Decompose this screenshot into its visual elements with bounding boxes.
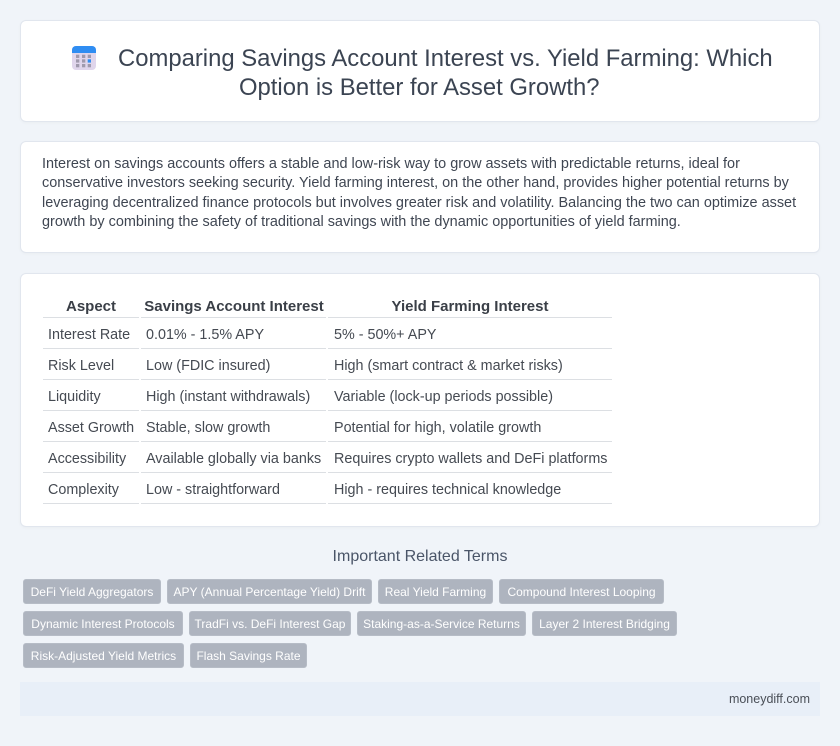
intro text: conservative investors seeking security. Yield farming interest, on the other hand, provides higher potential returns by bbox=[42, 175, 789, 191]
tag group: related terms: Real Yield Farming bbox=[385, 585, 486, 599]
comparison table: Available globally via banks bbox=[146, 451, 321, 467]
tag group: related terms: Compound Interest Looping bbox=[507, 585, 656, 599]
intro text: Interest on savings accounts offers a stable and low-risk way to grow assets with predictable returns, ideal for bbox=[42, 156, 740, 172]
comparison table: Complexity bbox=[48, 482, 119, 498]
comparison table: Interest Rate bbox=[48, 327, 130, 343]
panel: intro card bbox=[20, 141, 820, 253]
comparison table: Aspect bbox=[66, 298, 116, 315]
tag group: related terms: APY (Annual Percentage Yield) Drift bbox=[174, 585, 365, 599]
heading: related terms: Important Related Terms bbox=[333, 548, 507, 565]
comparison table: Risk Level bbox=[48, 358, 114, 374]
footer bar bbox=[20, 682, 820, 716]
comparison table: Variable (lock-up periods possible) bbox=[334, 389, 553, 405]
tag group: related terms: Flash Savings Rate bbox=[196, 649, 301, 663]
title bbox=[118, 45, 773, 101]
title: Comparing Savings Account Interest vs. Yield Farming: Which bbox=[118, 45, 773, 72]
panel: title card bbox=[20, 20, 820, 122]
comparison table: High - requires technical knowledge bbox=[334, 482, 561, 498]
panel: table card bbox=[20, 273, 820, 527]
comparison table: Liquidity bbox=[48, 389, 101, 405]
tag group: related terms: DeFi Yield Aggregators bbox=[31, 585, 153, 599]
intro text: growth by combining the safety of traditional savings with the dynamic opportunities of yield farming. bbox=[42, 214, 681, 230]
icon: calendar bbox=[72, 46, 96, 70]
tag group: related terms: Layer 2 Interest Bridging bbox=[539, 617, 670, 631]
comparison table: Savings Account Interest bbox=[144, 298, 324, 315]
comparison table: Low - straightforward bbox=[146, 482, 280, 498]
comparison table: Yield Farming Interest bbox=[392, 298, 548, 315]
comparison table: Potential for high, volatile growth bbox=[334, 420, 541, 436]
footer: source: moneydiff.com bbox=[729, 692, 810, 706]
tag group: related terms: Staking-as-a-Service Returns bbox=[363, 617, 520, 631]
comparison table: High (smart contract & market risks) bbox=[334, 358, 563, 374]
comparison table: Stable, slow growth bbox=[146, 420, 270, 436]
intro text bbox=[42, 156, 796, 230]
comparison table: Asset Growth bbox=[48, 420, 134, 436]
comparison table: 5% - 50%+ APY bbox=[334, 327, 436, 343]
intro text: leveraging decentralized finance protocols but involves greater risk and volatility. Balancing the two can optimize asset bbox=[42, 194, 796, 210]
comparison table: High (instant withdrawals) bbox=[146, 389, 310, 405]
comparison table: Accessibility bbox=[48, 451, 126, 467]
comparison table: Requires crypto wallets and DeFi platforms bbox=[334, 451, 607, 467]
comparison table: 0.01% - 1.5% APY bbox=[146, 327, 264, 343]
comparison table: Low (FDIC insured) bbox=[146, 358, 270, 374]
tag group: related terms: TradFi vs. DeFi Interest Gap bbox=[195, 617, 345, 631]
tag group: related terms: Risk-Adjusted Yield Metrics bbox=[31, 649, 176, 663]
comparison table bbox=[43, 298, 612, 504]
tag group: related terms bbox=[23, 579, 677, 668]
tag group: related terms: Dynamic Interest Protocols bbox=[31, 617, 175, 631]
title: Option is Better for Asset Growth? bbox=[239, 74, 599, 101]
